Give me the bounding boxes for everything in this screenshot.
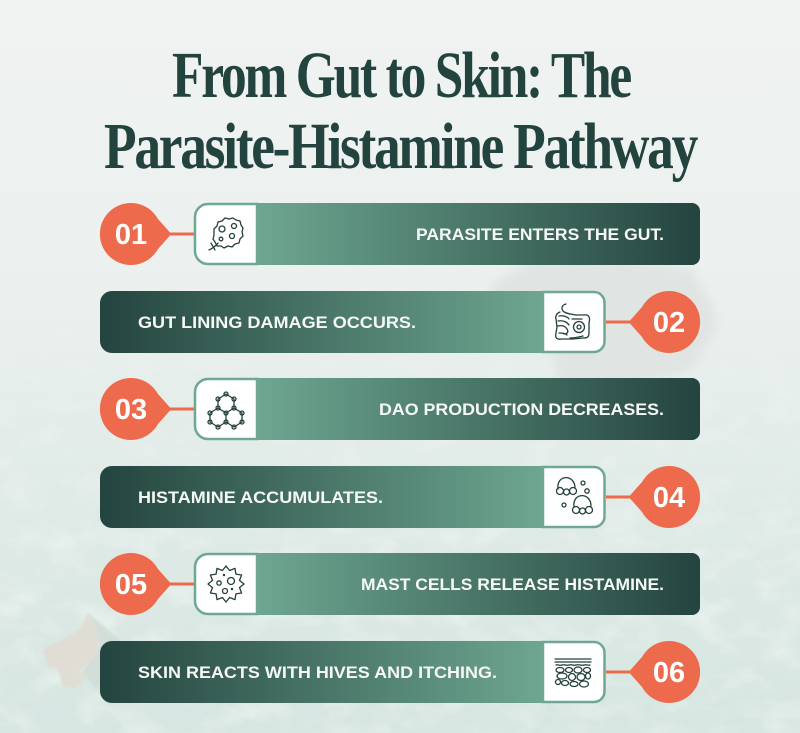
- icon box 04: histamine: [543, 467, 604, 527]
- bar 04: [100, 466, 550, 528]
- number badge 03: [100, 378, 194, 440]
- icon box 01: parasite: [195, 204, 257, 264]
- bar 06: [100, 641, 550, 703]
- label 03: DAO PRODUCTION DECREASES.: [379, 401, 664, 419]
- step 02: [100, 291, 700, 353]
- label 01: PARASITE ENTERS THE GUT.: [416, 226, 664, 244]
- number badge 06: 06: [653, 657, 685, 689]
- label 06: SKIN REACTS WITH HIVES AND ITCHING.: [138, 664, 497, 682]
- icon box 05: mast cell: [195, 554, 257, 614]
- number badge 02: 02: [653, 307, 685, 339]
- label 04: HISTAMINE ACCUMULATES.: [138, 489, 383, 507]
- number badge 01: 01: [115, 219, 147, 251]
- number badge 03: 03: [115, 394, 147, 426]
- number badge 06: [606, 641, 700, 703]
- number badge 01: [100, 203, 194, 265]
- step 06: [100, 641, 700, 703]
- number badge 05: 05: [115, 569, 147, 601]
- bar 05: [250, 553, 700, 615]
- title: [104, 39, 698, 183]
- bar 02: [100, 291, 550, 353]
- step 01: [100, 203, 700, 265]
- bar 01: [250, 203, 700, 265]
- number badge 04: 04: [653, 482, 685, 514]
- label 05: MAST CELLS RELEASE HISTAMINE.: [361, 576, 664, 594]
- step 05: [100, 553, 700, 615]
- icon box 02: gut lining: [543, 292, 604, 352]
- step 04: [100, 466, 700, 528]
- icon box 06: skin layers: [543, 642, 604, 702]
- step 03: [100, 378, 700, 440]
- label 02: GUT LINING DAMAGE OCCURS.: [138, 314, 416, 332]
- icon box 03: DAO molecule: [195, 379, 257, 439]
- bar 03: [250, 378, 700, 440]
- number badge 02: [606, 291, 700, 353]
- number badge 04: [606, 466, 700, 528]
- title: From Gut to Skin: The: [172, 39, 631, 112]
- number badge 05: [100, 553, 194, 615]
